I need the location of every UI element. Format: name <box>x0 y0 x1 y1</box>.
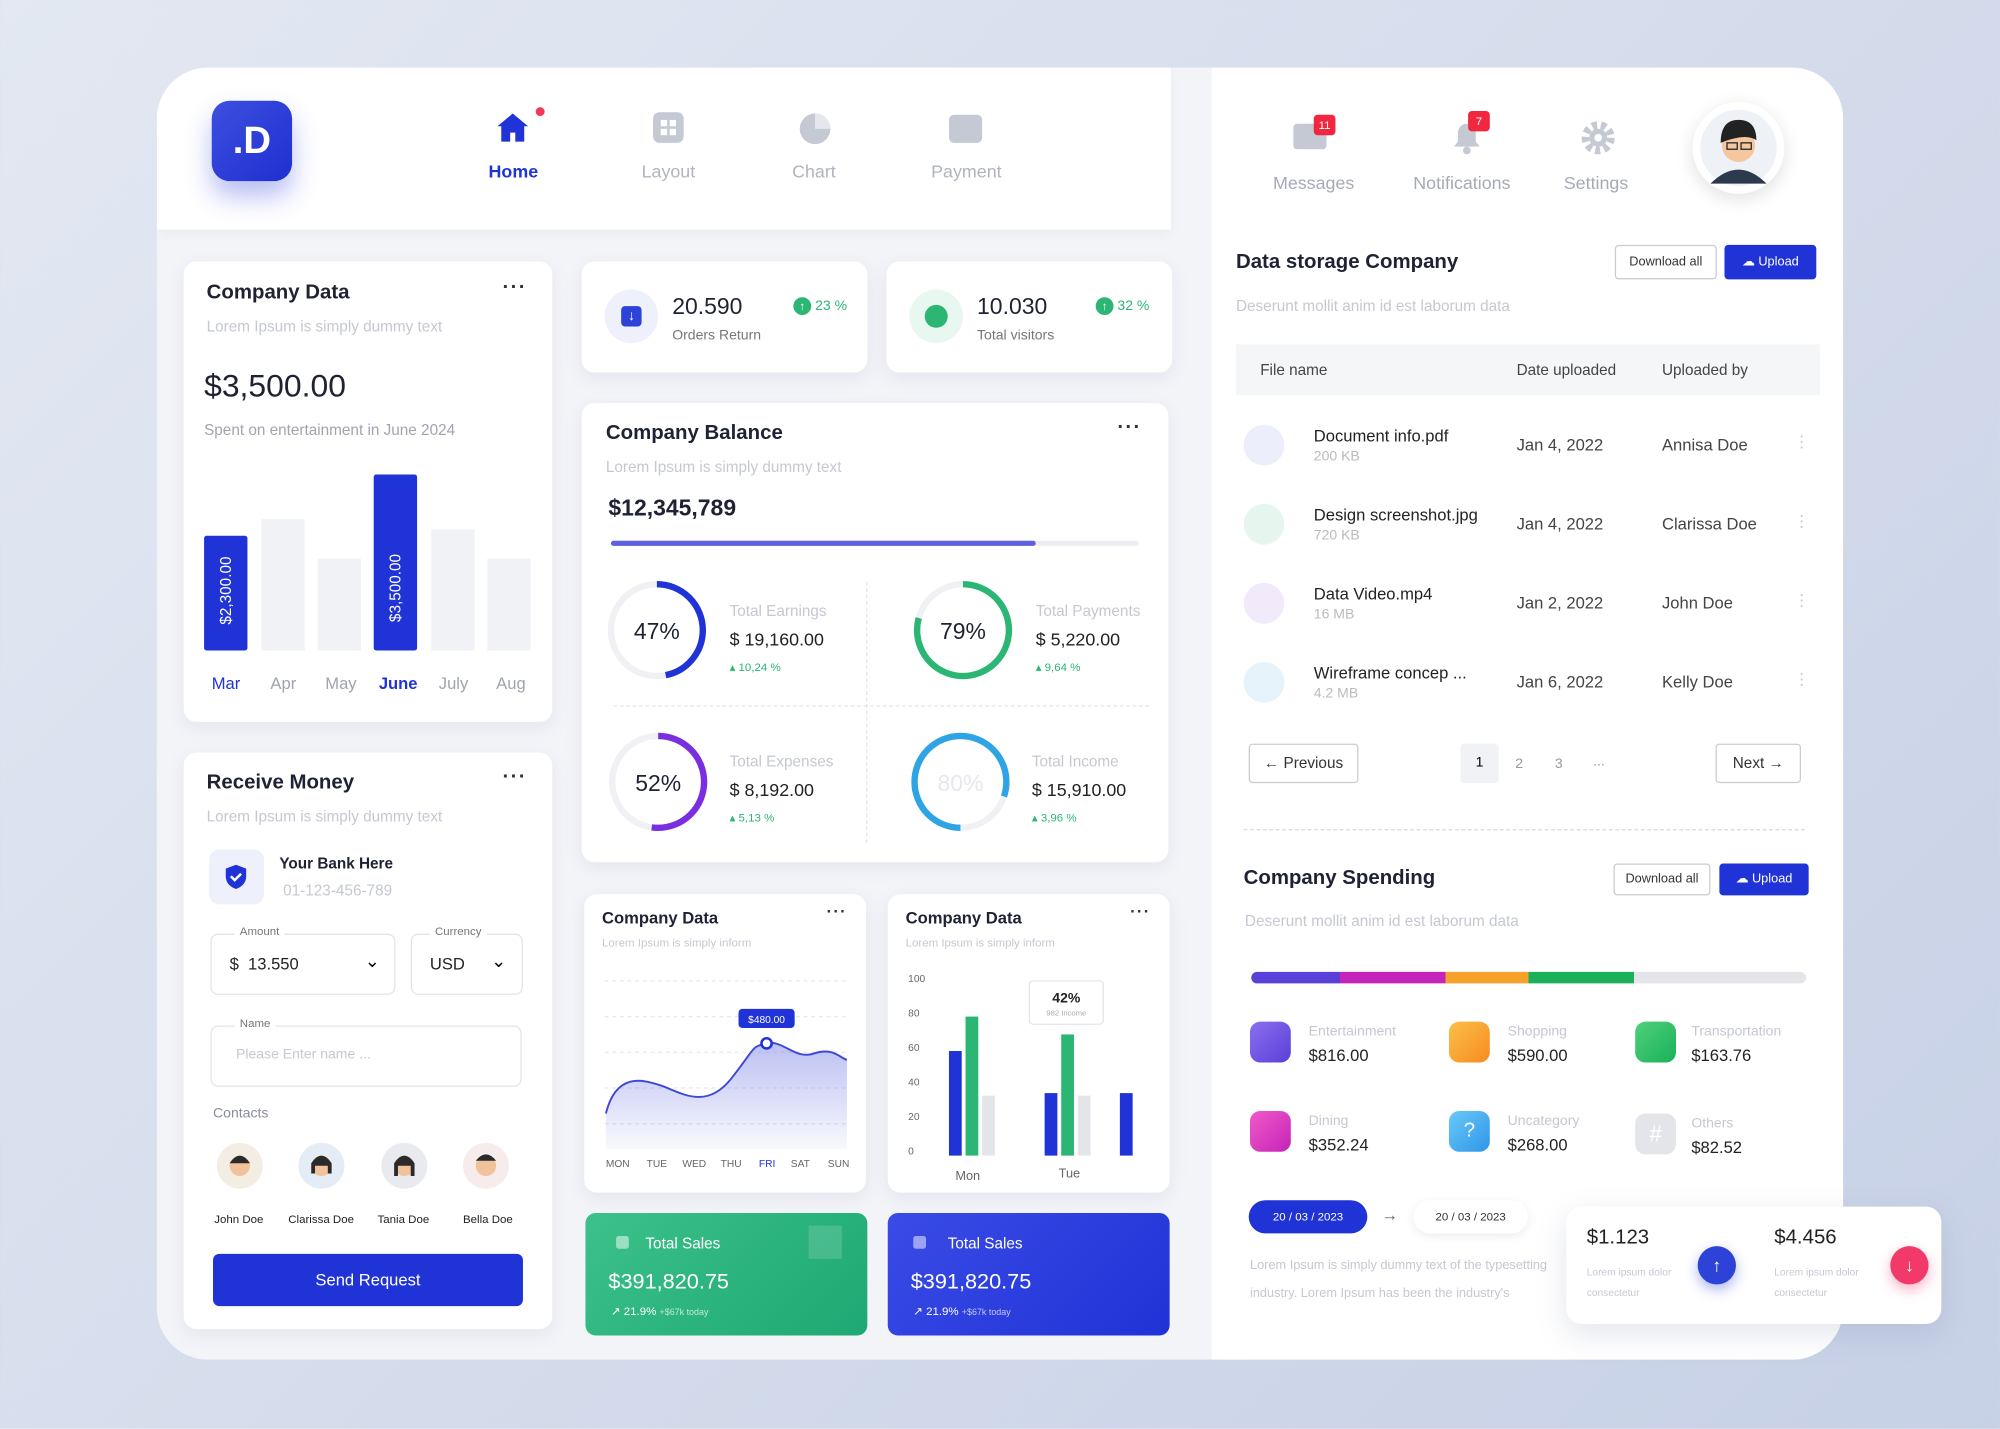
logo <box>212 101 292 181</box>
categories: $590.00 <box>1508 1046 1568 1065</box>
categories: Uncategory <box>1508 1114 1579 1129</box>
panel: data storage <box>1236 244 1820 784</box>
panel: receive money: ··· <box>503 767 527 788</box>
categories: # <box>1649 1121 1662 1147</box>
categories: Entertainment <box>1309 1024 1396 1040</box>
panel: receive money: ⌄ <box>491 950 506 971</box>
panel: receive money: Lorem Ipsum is simply dummy text <box>207 807 442 825</box>
panel: company balance: Total Earnings <box>730 602 827 620</box>
panel: grouped bar chart: 20 <box>908 1112 920 1123</box>
bar chart: $2,300.00 <box>217 557 235 625</box>
panel: company balance: $ 15,910.00 <box>1032 779 1126 800</box>
bar chart: Apr <box>270 673 296 693</box>
panel: data storage: Wireframe concep ... <box>1314 663 1467 682</box>
panel: line chart: TUE <box>647 1159 667 1170</box>
panel: receive money: $ 13.550 <box>230 954 299 973</box>
panel: data storage: 200 KB <box>1314 449 1360 464</box>
stat: total visitors: Total visitors <box>977 328 1054 343</box>
table: Date uploaded <box>1517 361 1616 379</box>
panel: grouped bar chart: 0 <box>908 1146 914 1157</box>
panel: data storage: Clarissa Doe <box>1662 514 1757 533</box>
panel: company balance: $12,345,789 <box>608 495 736 520</box>
panel: company spending: 20 / 03 / 2023 <box>1436 1210 1506 1223</box>
stat: orders return: ↑ <box>799 300 805 312</box>
panel: company balance: $ 8,192.00 <box>730 779 814 800</box>
card: total sales blue: ↗ 21.9% +$67k today <box>913 1305 1011 1318</box>
panel: data storage: Next → <box>1733 754 1784 772</box>
panel: line chart: SAT <box>791 1159 810 1170</box>
panel: company spending: Download all <box>1625 872 1698 886</box>
panel: company balance: ▴ 9,64 % <box>1036 661 1080 673</box>
card: total sales green: Total Sales <box>645 1235 720 1253</box>
bar chart: $3,500.00 <box>386 554 404 622</box>
bar chart: June <box>379 673 418 693</box>
panel: company balance: ▴ 3,96 % <box>1032 811 1077 824</box>
nav: Layout <box>642 161 695 181</box>
categories: $163.76 <box>1691 1046 1751 1065</box>
categories: Dining <box>1309 1114 1348 1129</box>
stat: total visitors <box>886 261 1172 372</box>
panel: grouped bar chart: 80 <box>908 1009 920 1020</box>
panel: receive money: USD <box>430 954 465 973</box>
nav: Chart <box>792 161 836 181</box>
panel: grouped bar chart: 100 <box>908 974 925 985</box>
avatar <box>1693 102 1784 194</box>
categories: Transportation <box>1691 1024 1781 1040</box>
panel: data storage: 4.2 MB <box>1314 686 1358 702</box>
categories: Shopping <box>1508 1024 1567 1040</box>
card: total sales blue: $391,820.75 <box>911 1269 1031 1293</box>
panel: data storage: Annisa Doe <box>1662 435 1748 454</box>
panel: data storage: ⋮ <box>1793 511 1810 531</box>
panel: company balance: Total Expenses <box>730 753 833 770</box>
categories: $268.00 <box>1508 1135 1568 1154</box>
panel: data storage: 1 <box>1476 755 1483 770</box>
panel: grouped bar chart: Mon <box>955 1168 980 1183</box>
bar chart: Mar <box>212 673 240 693</box>
panel: line chart: $480.00 <box>748 1015 785 1026</box>
panel: company balance: Lorem Ipsum is simply dummy text <box>606 458 841 476</box>
card: total sales blue: Total Sales <box>948 1235 1023 1253</box>
floating card: balances: Lorem ipsum dolor consectetur <box>1774 1267 1859 1298</box>
panel: company spending <box>1244 864 1809 1301</box>
icon: home <box>498 107 545 142</box>
contacts: Bella Doe <box>463 1213 513 1226</box>
panel: data storage: Jan 4, 2022 <box>1517 514 1603 533</box>
panel: grouped bar chart: 982 Income <box>1046 1008 1086 1017</box>
card: total sales green <box>585 1213 867 1335</box>
stat: orders return: 20.590 <box>672 293 742 319</box>
panel: grouped bar chart: 60 <box>908 1043 920 1054</box>
panel: company spending: Lorem Ipsum is simply dummy text of the typesetting industry. Lorem Ipsum has been the industry's <box>1250 1259 1547 1301</box>
floating card: balances: Lorem ipsum dolor consectetur <box>1587 1267 1671 1298</box>
table: Uploaded by <box>1662 361 1748 379</box>
bank <box>209 849 264 904</box>
floating card: balances: ↑ <box>1712 1255 1721 1276</box>
panel: data storage: John Doe <box>1662 593 1733 612</box>
panel: company data bar: Company Data <box>207 282 350 304</box>
bar chart: July <box>439 673 468 693</box>
categories: Others <box>1691 1116 1733 1131</box>
panel: data storage: Data storage Company <box>1236 251 1458 273</box>
categories: $352.24 <box>1309 1135 1369 1154</box>
panel: data storage: 16 MB <box>1314 607 1354 622</box>
panel: grouped bar chart: Company Data <box>906 908 1022 927</box>
main board <box>157 68 1843 1360</box>
top right nav: 11 <box>1319 119 1331 131</box>
panel: data storage: Kelly Doe <box>1662 672 1733 691</box>
panel: grouped bar chart: 40 <box>908 1077 920 1088</box>
panel: company spending: Company Spending <box>1244 867 1435 889</box>
stat: orders return: ↓ <box>628 309 635 324</box>
contacts: John Doe <box>214 1213 263 1226</box>
top right nav: Settings <box>1564 172 1628 193</box>
panel: data storage: Deserunt mollit anim id est laborum data <box>1236 297 1510 315</box>
panel: company spending: ☁ Upload <box>1736 872 1792 886</box>
panel: data storage: ⋮ <box>1793 591 1810 610</box>
donut charts: 47% <box>634 618 680 644</box>
stat: orders return: Orders Return <box>672 328 761 343</box>
logo: .D <box>233 120 271 162</box>
contacts <box>214 1143 513 1226</box>
donut charts: 80% <box>937 770 983 796</box>
panel: grouped bar chart: Tue <box>1059 1165 1080 1180</box>
categories: $82.52 <box>1691 1138 1742 1157</box>
panel: line chart <box>584 894 866 1193</box>
pagination: ← Previous <box>1264 754 1343 772</box>
panel: company balance: $ 19,160.00 <box>730 629 824 649</box>
donut charts <box>608 581 1012 831</box>
floating card: balances: ↓ <box>1905 1255 1914 1276</box>
panel: data storage: Design screenshot.jpg <box>1314 505 1478 524</box>
panel: data storage: Jan 4, 2022 <box>1517 435 1603 454</box>
donut charts: 79% <box>940 618 986 644</box>
panel: company balance: Total Payments <box>1036 602 1140 620</box>
categories: $816.00 <box>1309 1046 1369 1065</box>
card: total sales green: ↗ 21.9% +$67k today <box>611 1305 708 1318</box>
stat: total visitors: 10.030 <box>977 293 1047 319</box>
stat: orders return: 23 % <box>815 298 847 314</box>
panel: line chart: Lorem Ipsum is simply inform <box>602 936 751 949</box>
panel: line chart: ··· <box>827 902 847 921</box>
top right nav <box>1273 111 1628 193</box>
button: send request <box>213 1254 523 1306</box>
panel: data storage: 720 KB <box>1314 528 1360 543</box>
panel: company balance: ▴ 5,13 % <box>730 811 774 824</box>
panel: company balance <box>582 403 1168 862</box>
panel: company spending: → <box>1381 1205 1398 1224</box>
panel: company data bar: Lorem Ipsum is simply dummy text <box>207 318 442 335</box>
panel: grouped bar chart: 42% <box>1052 990 1081 1006</box>
panel: data storage: Data Video.mp4 <box>1314 584 1432 603</box>
panel: receive money: Please Enter name ... <box>236 1047 371 1062</box>
panel: company data bar: $3,500.00 <box>204 369 346 404</box>
top right nav: 7 <box>1476 115 1482 128</box>
panel: data storage: 3 <box>1555 756 1563 772</box>
panel: data storage: ⋮ <box>1793 432 1810 452</box>
panel: company spending: Deserunt mollit anim id est laborum data <box>1245 912 1519 930</box>
panel: company balance: $ 5,220.00 <box>1036 629 1120 649</box>
panel: receive money: Currency <box>435 925 482 937</box>
panel: company data bar: Spent on entertainment in June 2024 <box>204 421 455 439</box>
floating card: balances: $4.456 <box>1774 1227 1837 1249</box>
pagination <box>1249 744 1358 783</box>
top right nav: Notifications <box>1413 172 1511 193</box>
table: File name <box>1260 361 1327 379</box>
panel: line chart: MON <box>606 1159 630 1170</box>
bar chart: May <box>325 673 357 693</box>
contacts: Clarissa Doe <box>288 1213 354 1226</box>
panel: company data bar <box>184 261 552 722</box>
panel: line chart: WED <box>682 1159 706 1170</box>
panel: grouped bar chart <box>888 894 1170 1193</box>
stat: total visitors: ↑ <box>1102 300 1107 312</box>
stat: orders return <box>582 261 867 372</box>
card: total sales blue <box>888 1213 1170 1335</box>
panel: company balance: Company Balance <box>606 422 783 444</box>
panel: data storage: Download all <box>1629 255 1702 269</box>
panel: receive money: Receive Money <box>207 772 354 793</box>
panel: data storage: Document info.pdf <box>1314 426 1448 445</box>
panel: receive money: Name <box>240 1017 270 1029</box>
panel: data storage: Jan 2, 2022 <box>1517 593 1603 612</box>
floating card: balances <box>1566 1207 1941 1324</box>
panel: company data bar: ··· <box>503 277 527 298</box>
panel: company balance: ··· <box>1117 417 1142 439</box>
panel: receive money: ⌄ <box>365 950 380 971</box>
panel: company balance: Total Income <box>1032 753 1119 770</box>
card: total sales green: $391,820.75 <box>608 1269 729 1293</box>
top right nav: Messages <box>1273 172 1354 193</box>
bar chart: Aug <box>496 673 526 693</box>
button: send request: Send Request <box>315 1270 421 1290</box>
categories <box>1250 1022 1781 1157</box>
panel: line chart: SUN <box>828 1159 849 1170</box>
floating card: balances: $1.123 <box>1587 1227 1649 1249</box>
nav: Home <box>489 161 538 181</box>
nav <box>489 107 1002 181</box>
categories: ? <box>1464 1120 1475 1142</box>
panel: company spending: 20 / 03 / 2023 <box>1273 1210 1343 1223</box>
panel: data storage: 2 <box>1515 756 1523 772</box>
panel: data storage: ☁ Upload <box>1742 255 1799 269</box>
panel: line chart: Company Data <box>602 908 718 927</box>
panel: company balance: ▴ 10,24 % <box>730 661 781 673</box>
panel: line chart: FRI <box>759 1159 775 1170</box>
panel: receive money: 01-123-456-789 <box>283 881 392 899</box>
panel: data storage: ... <box>1593 754 1605 769</box>
panel: line chart: THU <box>721 1159 742 1170</box>
panel: data storage: ⋮ <box>1793 670 1810 689</box>
contacts: Tania Doe <box>378 1213 429 1226</box>
panel: grouped bar chart: ··· <box>1130 902 1151 921</box>
panel: receive money <box>184 753 552 1329</box>
panel: data storage: Jan 6, 2022 <box>1517 672 1603 691</box>
bar chart <box>204 474 530 693</box>
table <box>1236 344 1820 395</box>
stat: total visitors: 32 % <box>1117 298 1149 314</box>
panel: receive money: Contacts <box>213 1106 268 1121</box>
panel: grouped bar chart: Lorem Ipsum is simply inform <box>906 936 1055 949</box>
panel: receive money: Amount <box>240 925 279 937</box>
donut charts: 52% <box>635 770 681 796</box>
panel: receive money: Your Bank Here <box>279 855 393 872</box>
nav: Payment <box>931 161 1002 181</box>
